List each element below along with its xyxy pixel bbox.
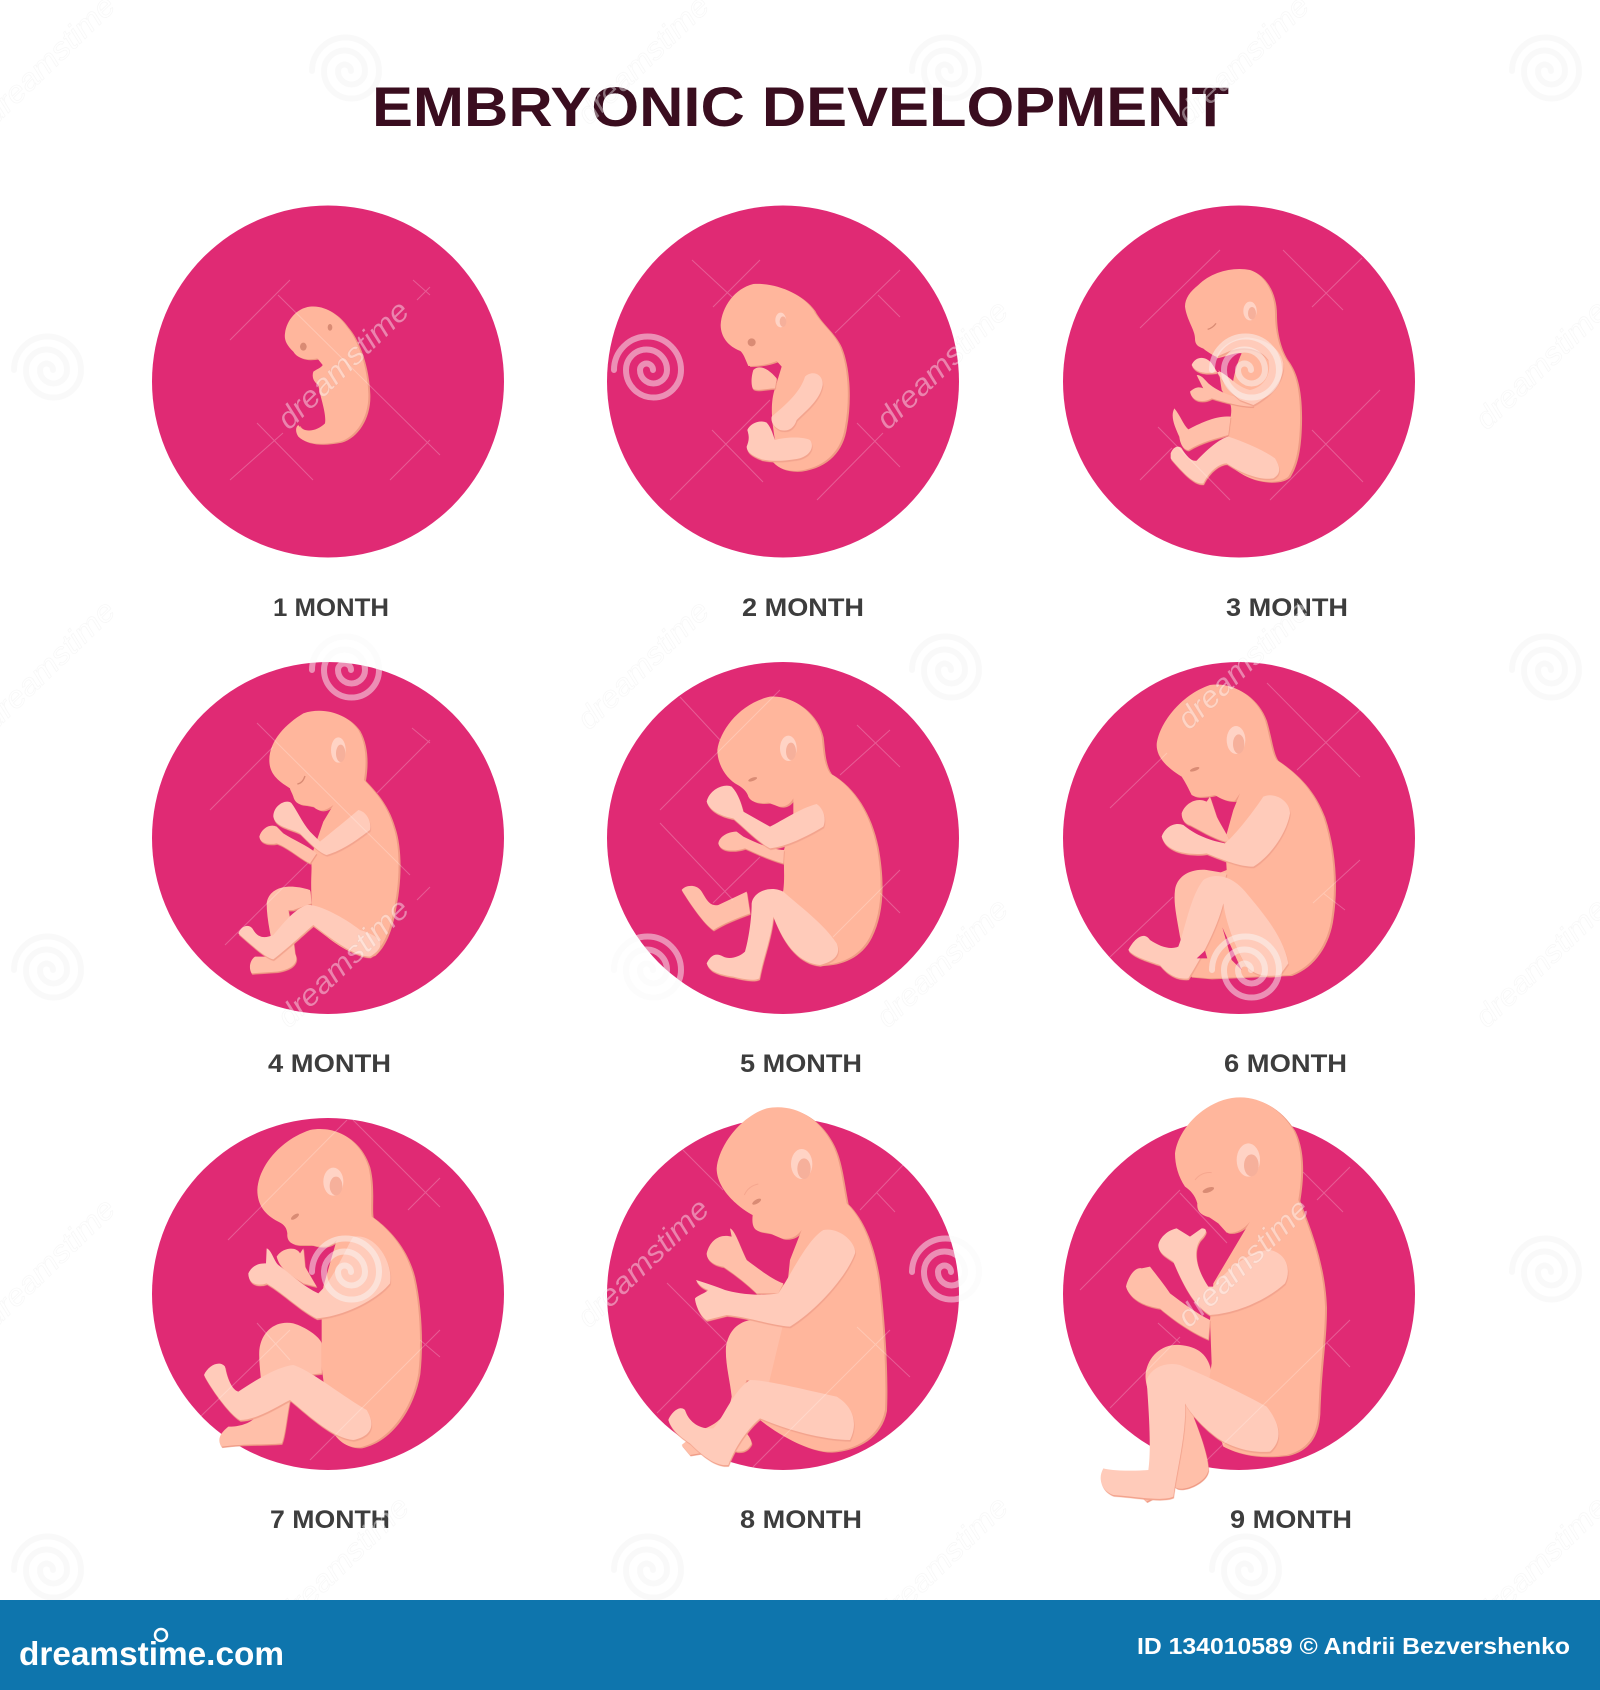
circle: 5 month [607,662,959,1014]
fetus: 5 month [682,697,881,980]
circle: 4 month [152,662,504,1014]
footer bar [0,1600,1600,1690]
watermark text: dreamstime [571,594,716,736]
panel: 8 month [607,1107,959,1534]
watermark text: dreamstime [571,1192,716,1334]
panel: 5 month [607,662,959,1078]
watermark text: dreamstime [1171,594,1316,736]
label: 4 month: 4 MONTH [268,1050,391,1078]
fetus: 6 month [1128,685,1334,979]
panel: 3 month [1063,206,1415,622]
fetus: 7 month [204,1129,420,1447]
watermark text: dreamstime [571,0,716,131]
watermark text: dreamstime [271,892,416,1034]
fetus: 4 month [238,711,399,973]
title: EMBRYONIC DEVELOPMENT [372,75,1229,138]
footer credit: ID 134010589 © Andrii Bezvershenko [1137,1633,1570,1659]
label: 3 month: 3 MONTH [1226,594,1348,622]
watermark text: dreamstime [870,294,1015,436]
fetus: 8 month [668,1107,885,1465]
panel: 7 month [152,1118,504,1534]
circle: 2 month [607,206,959,558]
watermark text: dreamstime [1171,0,1316,131]
label: 5 month: 5 MONTH [740,1050,862,1078]
watermark text: dreamstime [870,1490,1015,1632]
panel: 2 month [607,206,959,622]
fetus: 9 month [1101,1097,1325,1502]
panel: 4 month [152,662,504,1078]
footer logo text: dreamstime.com [19,1635,284,1672]
label: 8 month: 8 MONTH [740,1506,862,1534]
label: 7 month: 7 MONTH [270,1506,390,1534]
watermark text: dreamstime [1171,1192,1316,1334]
panel: 9 month [1063,1097,1415,1534]
label: 6 month: 6 MONTH [1224,1050,1347,1078]
label: 2 month: 2 MONTH [742,594,864,622]
watermark lines [200,250,1380,1467]
watermark text: dreamstime [870,892,1015,1034]
label: 9 month: 9 MONTH [1230,1506,1352,1534]
fetus: 3 month [1171,269,1300,483]
watermark text: dreamstime [271,294,416,436]
fetus: 1 month [285,307,368,444]
watermark text: dreamstime [271,1490,416,1632]
circle: 8 month [607,1118,959,1470]
panel: 1 month [152,206,504,622]
label: 1 month: 1 MONTH [273,594,389,622]
icon: logo spiral [155,1629,167,1641]
circle: 9 month [1063,1118,1415,1470]
circle: 3 month [1063,206,1415,558]
panel: 6 month [1063,662,1415,1078]
circle: 6 month [1063,662,1415,1014]
fetus: 2 month [721,284,848,471]
circle: 7 month [152,1118,504,1470]
circle: 1 month [152,206,504,558]
